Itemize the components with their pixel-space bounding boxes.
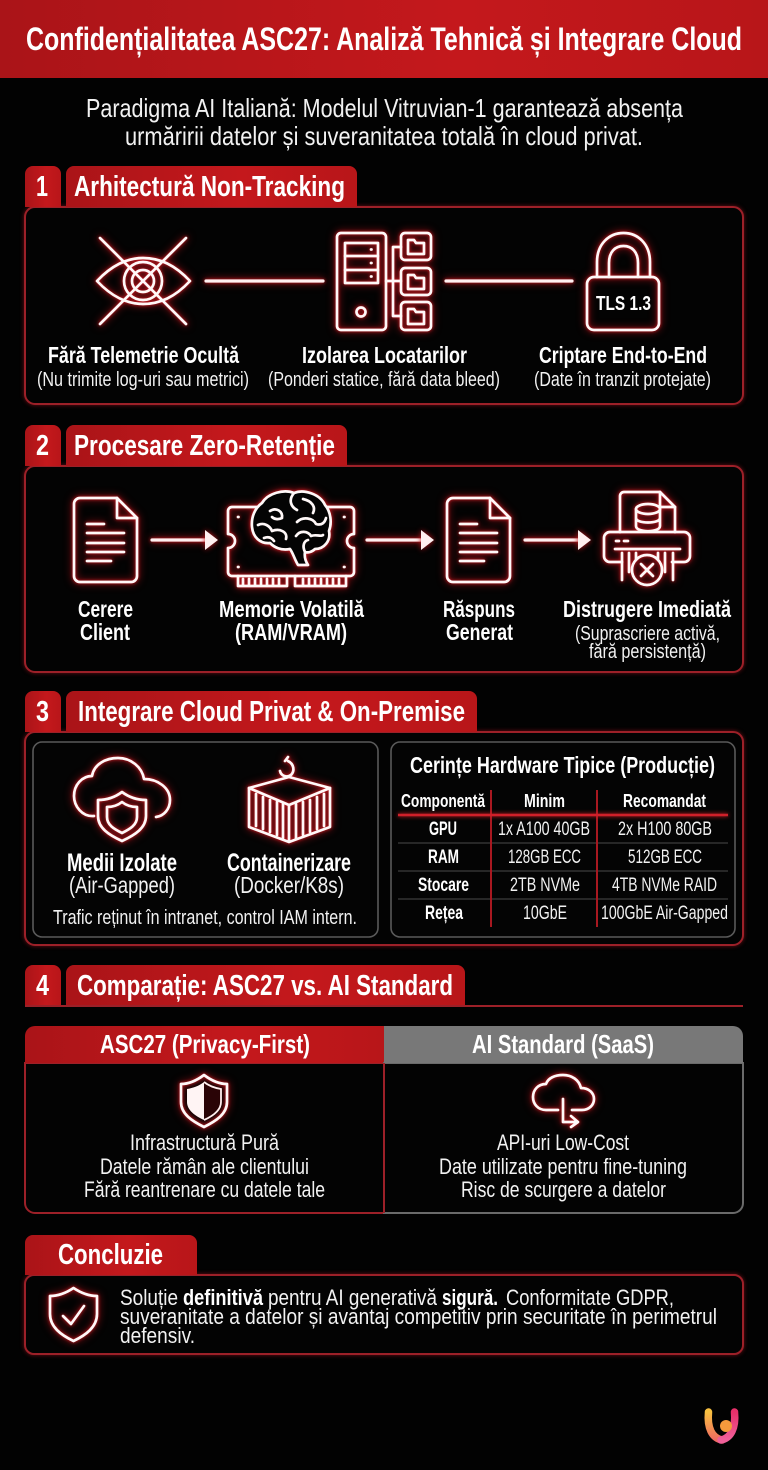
comparison: ASC27 column [25, 1026, 384, 1213]
icon: container with hook [249, 757, 330, 842]
section 1 heading: Arhitectură Non-Tracking [74, 171, 345, 203]
conclusion text [120, 1285, 717, 1348]
comparison: standard AI column: AI Standard (SaaS) [472, 1029, 654, 1059]
hardware requirements table: RAM [428, 847, 459, 868]
connector line [446, 279, 572, 283]
icon: cloud with leak arrow [533, 1075, 594, 1127]
icon: crossed-out eye [97, 238, 190, 324]
hardware requirements table: Stocare [418, 875, 469, 896]
icon: TLS padlock [587, 233, 659, 330]
arrow [367, 530, 434, 550]
hardware requirements table: Rețea [425, 903, 463, 924]
label: client request: Cerere [78, 596, 133, 622]
hardware requirements table: 1x A100 40GB [498, 819, 590, 840]
conclusion heading: Concluzie [58, 1239, 163, 1271]
icon: shredder [604, 492, 690, 585]
label: immediate destruction: fără persistență) [589, 641, 706, 663]
label: containerization: Containerizare [227, 849, 351, 877]
intro text [86, 93, 683, 151]
icon: cloud with shield [74, 758, 170, 841]
section 2 heading: Procesare Zero-Retenție [74, 430, 335, 462]
hardware requirements table: 100GbE Air-Gapped [601, 903, 728, 924]
ASC27 benefits list: Datele rămân ale clientului [100, 1154, 309, 1179]
section 2 frame [25, 466, 743, 672]
sub-panel: deployment options [33, 742, 378, 937]
hardware requirements table: Recomandat [623, 791, 706, 811]
label: volatile memory [219, 596, 364, 645]
hardware requirements table: 4TB NVMe RAID [612, 875, 717, 896]
ASC27 benefits list: Fără reantrenare cu datele tale [84, 1177, 325, 1202]
hardware requirements table: 2x H100 80GB [618, 819, 712, 840]
hardware requirements table: Minim [524, 791, 565, 811]
label: immediate destruction: (Suprascriere activă, [575, 623, 720, 645]
conclusion text: definitivă [183, 1285, 264, 1310]
section 4 heading: Comparație: ASC27 vs. AI Standard [77, 970, 453, 1002]
label: air-gapped: Medii Izolate [67, 849, 177, 877]
icon: TLS padlock: TLS 1.3 [596, 293, 651, 315]
hardware requirements table: Componentă [401, 791, 486, 811]
label: generated response: Răspuns [443, 596, 515, 622]
label: containerization: (Docker/K8s) [234, 872, 344, 898]
sub-panel: hardware table [391, 742, 735, 937]
label: client request: Client [80, 619, 130, 645]
section 2 heading: 2 [36, 430, 49, 462]
hardware requirements table: 10GbE [523, 903, 567, 924]
ASC27 benefits list [84, 1130, 325, 1202]
section 4 heading [25, 965, 743, 1006]
intro text: urmăririi datelor și suveranitatea totală în cloud privat. [125, 121, 643, 151]
section 3 heading: Integrare Cloud Privat & On-Premise [78, 696, 465, 728]
panel: section 2 zero retention [25, 425, 743, 672]
panel: section 1 architecture [25, 166, 743, 404]
standard AI drawbacks list: Date utilizate pentru fine-tuning [439, 1154, 687, 1179]
label: tenant isolation: (Ponderi statice, fără data bleed) [268, 369, 500, 391]
standard AI drawbacks list: Risc de scurgere a datelor [461, 1177, 666, 1202]
section 2 heading [25, 425, 347, 466]
title banner [0, 0, 768, 78]
hardware requirements table: GPU [429, 819, 457, 840]
hardware requirements table: 512GB ECC [628, 847, 702, 868]
conclusion text: Soluție [120, 1285, 178, 1310]
connector line [206, 279, 323, 283]
section 3 frame [25, 732, 743, 945]
label: no telemetry: (Nu trimite log-uri sau metrici) [37, 369, 249, 391]
label: encryption: (Date în tranzit protejate) [534, 369, 711, 391]
label: no telemetry [37, 342, 249, 391]
icon: server and folders [337, 233, 431, 330]
standard AI drawbacks list [439, 1130, 687, 1202]
comparison: standard AI column [384, 1026, 743, 1213]
panel: section 3 private cloud [25, 691, 743, 945]
panel: conclusion [25, 1235, 743, 1354]
conclusion text: Conformitate GDPR, [506, 1285, 674, 1310]
label: air-gapped [67, 849, 177, 898]
label: generated response: Generat [446, 619, 513, 645]
label: containerization [227, 849, 351, 898]
label: tenant isolation: Izolarea Locatarilor [302, 342, 467, 368]
conclusion frame [25, 1275, 743, 1354]
section 1 frame [25, 207, 743, 404]
label: generated response [443, 596, 515, 645]
hardware requirements table: 2TB NVMe [510, 875, 580, 896]
conclusion text: defensiv. [120, 1323, 195, 1348]
conclusion heading [25, 1235, 197, 1275]
standard AI drawbacks list: API-uri Low-Cost [497, 1130, 629, 1155]
label: no telemetry: Fără Telemetrie Ocultă [48, 342, 239, 368]
icon: response document [447, 498, 510, 582]
label: tenant isolation [268, 342, 500, 391]
section 1 heading [25, 166, 357, 207]
section 4 heading: 4 [36, 970, 49, 1002]
arrow [152, 530, 218, 550]
label: client request [78, 596, 133, 645]
icon: shield with check [50, 1288, 97, 1341]
hardware requirements table [398, 790, 728, 927]
conclusion text: sigură. [442, 1285, 498, 1310]
section 1 heading: 1 [36, 171, 48, 203]
hardware requirements table: 128GB ECC [508, 847, 581, 868]
logo [708, 1412, 735, 1440]
arrow [525, 530, 591, 550]
label: encryption [534, 342, 711, 391]
label: volatile memory: (RAM/VRAM) [235, 619, 347, 645]
label: encryption: Criptare End-to-End [539, 342, 707, 368]
label: immediate destruction [563, 596, 731, 663]
label: volatile memory: Memorie Volatilă [219, 596, 364, 622]
section 3 heading [25, 691, 477, 732]
ASC27 benefits list: Infrastructură Pură [130, 1130, 280, 1155]
section 3 heading: 3 [36, 696, 49, 728]
icon: half-filled shield [181, 1075, 227, 1127]
icon: brain on RAM module [228, 491, 354, 586]
label: air-gapped: (Air-Gapped) [69, 872, 175, 898]
icon: request document [74, 498, 137, 582]
note: intranet traffic: Trafic reținut în intranet, control IAM intern. [53, 907, 357, 929]
comparison: ASC27 column: ASC27 (Privacy-First) [100, 1029, 310, 1059]
conclusion text: pentru AI generativă [268, 1285, 438, 1310]
